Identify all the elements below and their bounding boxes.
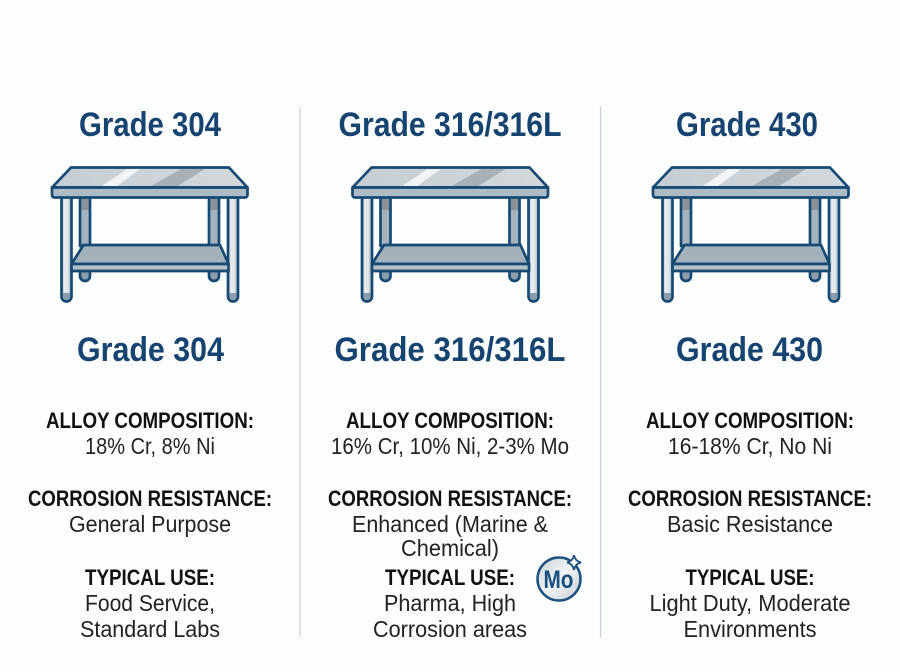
text: typical use: Standard Labs: [80, 616, 220, 642]
text: alloy composition: 16% Cr, 10% Ni, 2-3% Mo: [331, 433, 569, 459]
heading: Grade 304: Grade 304: [79, 106, 221, 144]
text: corrosion resistance: Enhanced (Marine &: [352, 511, 548, 537]
subheading: Grade 316/316L: Grade 316/316L: [334, 331, 566, 369]
text: corrosion resistance: Chemical): [401, 535, 499, 561]
panel: Grade 430: [628, 106, 872, 642]
icon: molybdenum badge: Mo: [544, 566, 574, 594]
text: typical use: TYPICAL USE:: [85, 565, 215, 590]
icon: steel table: [352, 168, 548, 302]
icon: steel table: [653, 168, 848, 302]
column divider 1: [299, 107, 301, 637]
text: typical use: Environments: [684, 616, 816, 642]
text: typical use: [80, 565, 220, 642]
subheading: Grade 430: Grade 430: [676, 331, 823, 369]
heading: Grade 316/316L: Grade 316/316L: [338, 106, 562, 144]
icon: steel table: [52, 168, 248, 302]
text: alloy composition: ALLOY COMPOSITION:: [646, 408, 854, 433]
text: alloy composition: 18% Cr, 8% Ni: [85, 433, 215, 459]
text: typical use: Corrosion areas: [373, 616, 527, 642]
text: corrosion resistance: CORROSION RESISTANCE:: [28, 486, 272, 511]
text: typical use: TYPICAL USE:: [385, 565, 515, 590]
panel: Grade 316/316L: [328, 106, 581, 642]
text: typical use: Food Service,: [85, 590, 215, 616]
text: typical use: TYPICAL USE:: [686, 565, 814, 590]
text: alloy composition: [331, 408, 569, 459]
icon: molybdenum badge: [538, 555, 581, 600]
text: typical use: Light Duty, Moderate: [650, 590, 850, 616]
text: alloy composition: ALLOY COMPOSITION:: [46, 408, 254, 433]
text: alloy composition: ALLOY COMPOSITION:: [346, 408, 554, 433]
text: typical use: Pharma, High: [384, 590, 516, 616]
text: alloy composition: [646, 408, 854, 459]
heading: Grade 430: Grade 430: [676, 106, 818, 144]
text: corrosion resistance: Basic Resistance: [667, 511, 833, 537]
text: corrosion resistance: CORROSION RESISTANCE:: [328, 486, 572, 511]
text: typical use: [650, 565, 850, 642]
text: corrosion resistance: [328, 486, 572, 561]
text: corrosion resistance: [628, 486, 872, 537]
panel: Grade 304: [28, 106, 272, 642]
text: corrosion resistance: General Purpose: [69, 511, 231, 537]
subheading: Grade 304: Grade 304: [77, 331, 224, 369]
text: corrosion resistance: [28, 486, 272, 537]
column divider 2: [600, 107, 602, 637]
text: alloy composition: [46, 408, 254, 459]
text: typical use: [373, 565, 527, 642]
text: alloy composition: 16-18% Cr, No Ni: [668, 433, 832, 459]
